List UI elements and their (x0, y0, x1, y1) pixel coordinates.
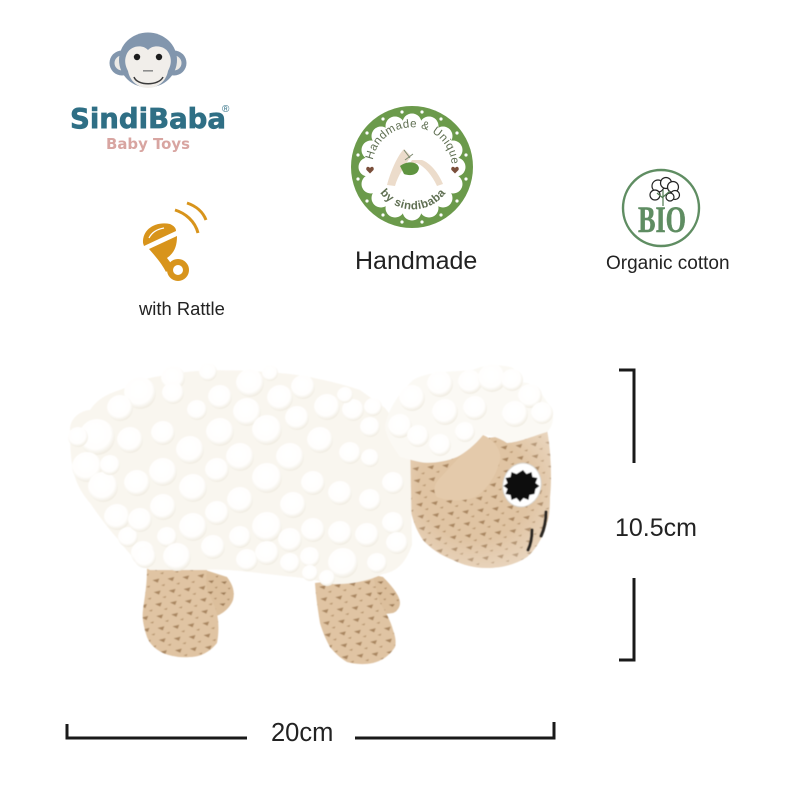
dimension: width 20cm (67, 719, 554, 747)
height value: 10.5cm (615, 514, 697, 542)
dimension: height 10.5cm (615, 370, 697, 660)
label: organic cotton: Organic cotton (606, 253, 730, 274)
feature: handmade (351, 106, 477, 275)
ear (434, 435, 500, 500)
heart left (366, 167, 374, 174)
head (400, 430, 551, 568)
front legs (143, 568, 396, 664)
height bracket bottom (619, 578, 634, 660)
feature: with rattle (138, 203, 225, 319)
brand logo: SindiBaba Baby Toys (70, 32, 230, 153)
eye (499, 460, 545, 510)
height bracket top (619, 370, 634, 463)
label: handmade: Handmade (355, 247, 477, 275)
width bracket left (67, 724, 247, 738)
width value: 20cm (271, 719, 333, 747)
badge arc text: Handmade & Unique (365, 119, 458, 164)
icon: rattle (143, 203, 206, 278)
product: crocheted sheep (68, 363, 553, 664)
BIO letters: BIO (638, 200, 686, 241)
badge: handmade and unique (351, 106, 473, 228)
icon: monkey face (110, 32, 186, 88)
scalloped inner edge (356, 110, 468, 224)
registered mark: ® (222, 104, 230, 115)
width bracket right (355, 722, 554, 738)
label: with rattle: with Rattle (138, 298, 225, 319)
head wool (385, 364, 553, 463)
mouth (528, 512, 546, 550)
feature: organic cotton (606, 170, 730, 274)
body wool (68, 363, 412, 586)
heart right (451, 167, 459, 174)
hands and leaf illustration (387, 149, 443, 186)
back legs (205, 570, 400, 617)
logo tagline: Baby Toys (106, 135, 190, 153)
logo wordmark: SindiBaba (70, 102, 226, 135)
badge by sindibaba text: by sindibaba (380, 188, 446, 210)
icon: cotton flower (650, 178, 680, 206)
